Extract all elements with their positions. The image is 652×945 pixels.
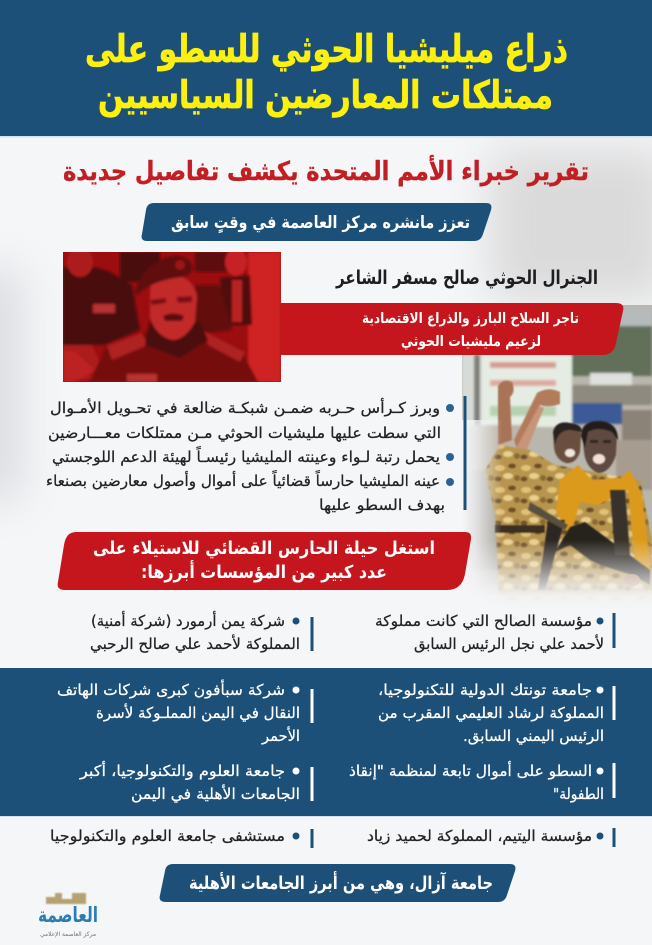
bullet list: general's profile: وبرز كـرأس حـربه ضمـن شبكـة ضالعة في تحـويل الأمـوال xyxy=(50,398,440,418)
item: University of Science and Technology xyxy=(79,761,314,804)
red banner: general's role: لزعيم مليشيات الحوثي xyxy=(401,334,541,350)
item: Tonantech university xyxy=(378,681,616,746)
item: university hospital: مستشفى جامعة العلوم والتكنولوجيا xyxy=(50,827,285,845)
item: Save the Children funds xyxy=(349,761,616,803)
hand xyxy=(624,574,640,586)
header band xyxy=(0,0,652,138)
red callout: judicial guard trick xyxy=(58,532,471,590)
logo: Al-Asima media center: مركز العاصمة الإعلامي xyxy=(40,931,96,938)
item: Yemen Armored xyxy=(90,611,314,654)
red callout: judicial guard trick: عدد كبير من المؤسسات أبرزها: xyxy=(141,560,387,583)
bullet list: general's profile: عينه المليشيا حارساً قضائياً على أموال وأصول معارضين بصنعاء xyxy=(46,470,440,490)
item: Tonantech university: الرئيس اليمني السابق. xyxy=(463,727,604,746)
item: Al-Saleh foundation: لأحمد علي نجل الرئيس السابق xyxy=(414,634,604,654)
item: Al-Saleh foundation: مؤسسة الصالح التي كانت مملوكة xyxy=(375,612,592,631)
item: Yemen Armored: شركة يمن أرمورد (شركة أمنية) xyxy=(91,611,285,630)
item: Al-Yateem foundation: مؤسسة اليتيم، المملوكة لحميد زياد xyxy=(367,827,592,845)
item: Sabafon: الأحمر xyxy=(261,726,300,745)
item: University of Science and Technology: الجامعات الأهلية في اليمن xyxy=(131,784,300,804)
bullet list: general's profile: بهدف السطو عليها xyxy=(319,496,445,514)
pill: Azal university: جامعة آزال، وهي من أبرز الجامعات الأهلية xyxy=(189,871,493,894)
pill: previous report note: تعزز مانشره مركز العاصمة في وقتٍ سابق xyxy=(171,213,470,234)
item: Al-Saleh foundation xyxy=(375,612,616,654)
blue band xyxy=(0,668,652,817)
item: University of Science and Technology: جامعة العلوم والتكنولوجيا، أكبر xyxy=(79,761,285,780)
item: Save the Children funds: السطو على أموال تابعة لمنظمة "إنقاذ xyxy=(349,761,592,780)
arms xyxy=(498,381,560,452)
fades xyxy=(462,540,652,610)
bullet list: general's profile: التي سطت عليها مليشيات الحوثي مـن ممتلكات معـــارضين xyxy=(48,424,441,443)
bullet list: general's profile xyxy=(46,396,466,514)
red subtitle: تقرير خبراء الأمم المتحدة يكشف تفاصيل جديدة xyxy=(63,155,589,187)
orange scarf xyxy=(556,465,650,570)
item: Tonantech university: جامعة تونتك الدولية للتكنولوجيا، xyxy=(378,681,592,699)
pill: previous report note xyxy=(142,203,491,241)
bullet list: general's profile: يحمل رتبة لـواء وعينته المليشيا رئيسـاً لهيئة الدعم اللوجستي xyxy=(52,446,440,467)
item: Save the Children funds: الطفولة" xyxy=(553,785,604,803)
item: Sabafon: النقال في اليمن المملـوكة لأسرة xyxy=(96,703,300,723)
photo: Houthi general in red tint xyxy=(63,247,281,382)
soldier bodies xyxy=(485,445,652,610)
item: Tonantech university: المملوكة لرشاد العليمي المقرب من xyxy=(378,704,604,723)
title xyxy=(85,27,568,117)
red banner: general's role xyxy=(281,303,623,355)
red banner: general's role: تاجر السلاح البارز والذراع الاقتصادية xyxy=(362,311,579,327)
item: Yemen Armored: المملوكة لأحمد علي صالح الرحبي xyxy=(90,634,300,654)
pill: Azal university xyxy=(160,864,515,902)
item: Sabafon xyxy=(57,679,314,745)
rifle xyxy=(528,490,650,590)
logo: Al-Asima media center: العاصمة xyxy=(38,903,98,927)
red callout: judicial guard trick: استغل حيلة الحارس القضائي للاستيلاء على xyxy=(93,538,435,559)
background photo: protesting soldiers xyxy=(462,305,652,610)
heads xyxy=(553,421,618,473)
logo: Al-Asima media center xyxy=(38,893,98,938)
item: Sabafon: شركة سبأفون كبرى شركات الهاتف xyxy=(57,679,285,699)
